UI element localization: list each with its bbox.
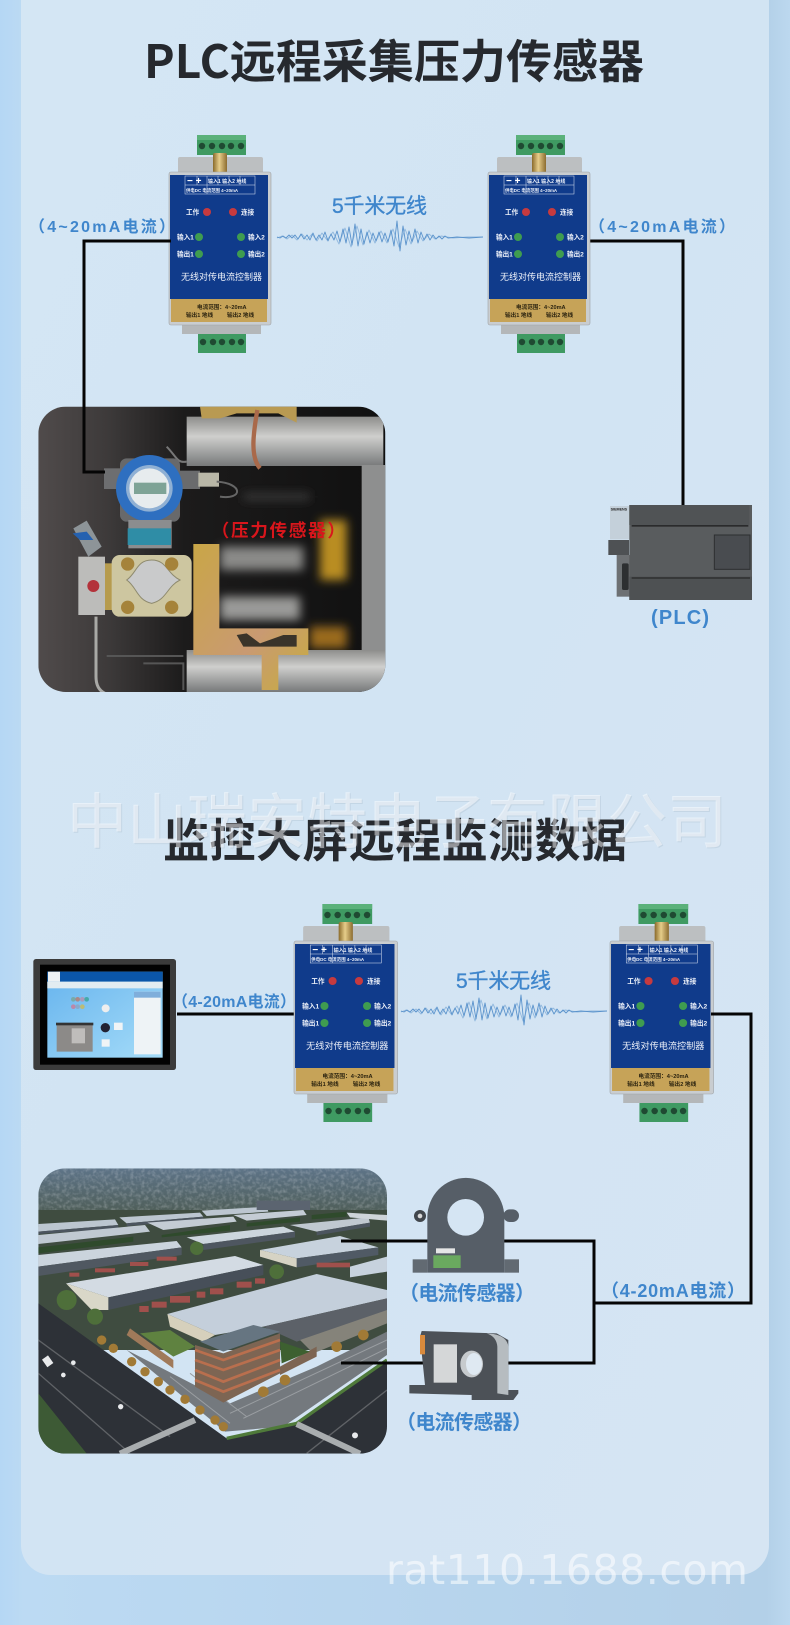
controller device 4 xyxy=(610,904,714,1122)
title: PLC remote acquisition: PLC远程采集压力传感器 xyxy=(144,26,644,92)
controller device 4: 连接 xyxy=(683,977,697,985)
terminal table xyxy=(185,176,255,194)
controller device 4: 输入2 xyxy=(690,1002,708,1010)
controller device 2: 供电DC 电流范围 4~20mA xyxy=(505,187,558,194)
controller device 2: 工作 xyxy=(505,208,519,216)
controller device 3: 输出1 地线 xyxy=(311,1080,339,1088)
controller device 4: 输出1 xyxy=(618,1019,635,1027)
controller device 2: 输入2 xyxy=(567,232,584,242)
tree rows xyxy=(97,1330,369,1431)
controller device 1: 输出2 地线 xyxy=(227,311,254,319)
top terminal block xyxy=(197,135,246,155)
blue face xyxy=(170,175,268,299)
label: wireless range bottom: 5千米无线 xyxy=(456,970,551,993)
mounting bracket xyxy=(193,544,308,690)
controller device 1: 输出1 地线 xyxy=(186,311,213,319)
impulse tube xyxy=(96,617,105,693)
controller device 2: 输入1 xyxy=(496,232,513,242)
device name: 无线对传电流控制器 xyxy=(181,271,262,282)
controller device 3: 输入1 xyxy=(302,1002,319,1010)
right frame pipe xyxy=(362,465,385,655)
vehicles xyxy=(42,1355,358,1438)
controller device 2 xyxy=(488,135,590,353)
controller device 2: 连接 xyxy=(560,208,574,216)
controller device 3: − + xyxy=(312,945,327,956)
controller device 1: 输入2 xyxy=(248,232,265,242)
controller device 1: 输入1 xyxy=(177,232,194,242)
controller device 3: 电流范围：4~20mA xyxy=(322,1072,373,1080)
controller device 1: 工作 xyxy=(186,208,200,216)
PLC module: SIEMENS xyxy=(611,508,628,512)
controller device 3: 工作 xyxy=(311,977,325,985)
connector: device 2 to PLC xyxy=(589,241,683,506)
antenna xyxy=(213,153,227,173)
controller device 3: 连接 xyxy=(367,977,381,985)
wireless waveform top xyxy=(277,221,483,251)
controller device 4: 无线对传电流控制器 xyxy=(622,1040,704,1051)
label: combined current signal: （4-20mA电流） xyxy=(601,1281,745,1301)
title: monitoring screen: 监控大屏远程监测数据 xyxy=(163,805,627,871)
photo: industrial park aerial view xyxy=(38,1168,387,1454)
controller device 2: 输出2 地线 xyxy=(546,311,573,319)
controller device 2: 输入1 输入2 地线 xyxy=(527,178,565,185)
controller device 4: 输出2 地线 xyxy=(669,1080,697,1088)
controller device 3: 无线对传电流控制器 xyxy=(306,1040,388,1051)
connector: screen to device 3 xyxy=(177,1012,295,1016)
controller device 4: − + xyxy=(628,945,643,956)
main facility xyxy=(127,1274,387,1403)
label: current sensor 2: （电流传感器） xyxy=(396,1411,532,1434)
controller device 4: 电流范围：4~20mA xyxy=(638,1072,689,1080)
touch screen HMI xyxy=(33,959,176,1070)
top pipe xyxy=(187,417,383,466)
label: HMI current signal: （4-20mA电流） xyxy=(172,992,296,1011)
left trees xyxy=(38,1393,87,1454)
label: right current signal: （4~20mA电流） xyxy=(589,217,735,236)
status leds xyxy=(195,208,245,258)
controller device 1: 输出1 xyxy=(177,250,194,258)
controller device 3 xyxy=(294,904,398,1122)
warehouse row xyxy=(38,1227,387,1310)
terminal table: 输入1 输入2 地线 xyxy=(208,178,246,185)
controller device 3: 输入1 输入2 地线 xyxy=(334,947,372,954)
controller device 2: 输出1 地线 xyxy=(505,311,532,319)
controller device 3: 输出1 xyxy=(302,1019,319,1027)
controller device 1: 连接 xyxy=(241,208,255,216)
current sensor 2 xyxy=(409,1331,518,1400)
watermark company: 中山瑞安特电子有限公司 xyxy=(67,774,727,861)
current sensor 1 xyxy=(413,1178,519,1273)
photo: pressure sensor installation xyxy=(38,407,385,693)
green strips xyxy=(38,1212,347,1253)
controller device 3: 输出2 xyxy=(374,1019,392,1027)
controller device 1: 输出2 xyxy=(248,250,265,258)
transmitter xyxy=(104,447,237,548)
controller device 3: 供电DC 电流范围 4~20mA xyxy=(311,956,365,963)
trucks xyxy=(69,1257,350,1312)
gold strip xyxy=(171,299,267,322)
road and plaza xyxy=(38,1303,387,1454)
controller device 2: − + xyxy=(506,176,521,187)
controller device 4: 供电DC 电流范围 4~20mA xyxy=(627,956,681,963)
terminal table: 供电DC 电流范围 4~20mA xyxy=(186,187,239,194)
controller device 4: 输出2 xyxy=(690,1019,708,1027)
controller device 2: 输出2 xyxy=(567,250,584,258)
red label: （压力传感器） xyxy=(212,521,345,541)
label: current sensor 1: （电流传感器） xyxy=(399,1282,535,1305)
top clamp xyxy=(200,407,297,423)
controller device 3: 输入2 xyxy=(374,1002,392,1010)
terminal table: − + xyxy=(187,176,202,187)
controller device 2: 输出1 xyxy=(496,250,513,258)
watermark url: rat110.1688.com xyxy=(386,1546,748,1594)
controller device 1: 电流范围：4~20mA xyxy=(197,303,247,311)
connector: device 4 to current sensors and photo xyxy=(341,1014,751,1363)
PLC module xyxy=(608,505,752,600)
controller device 4: 工作 xyxy=(627,977,641,985)
wireless waveform bottom xyxy=(401,995,607,1025)
connector: device 1 to pressure sensor xyxy=(84,241,171,472)
bottom terminal block xyxy=(198,334,246,353)
label: left current signal: （4~20mA电流） xyxy=(29,217,175,236)
controller device 4: 输入1 xyxy=(618,1002,635,1010)
controller device 3: 输出2 地线 xyxy=(353,1080,381,1088)
controller device 4: 输入1 输入2 地线 xyxy=(650,947,688,954)
far warehouses xyxy=(38,1201,387,1244)
valve manifold xyxy=(73,521,192,617)
controller device 2: 无线对传电流控制器 xyxy=(500,271,581,282)
controller device 1 xyxy=(169,135,271,353)
bottom pipe xyxy=(187,650,385,692)
controller device 4: 输出1 地线 xyxy=(627,1080,655,1088)
controller device 2: 电流范围：4~20mA xyxy=(516,303,566,311)
label: PLC: (PLC) xyxy=(651,607,709,629)
label: wireless range top: 5千米无线 xyxy=(332,195,427,218)
